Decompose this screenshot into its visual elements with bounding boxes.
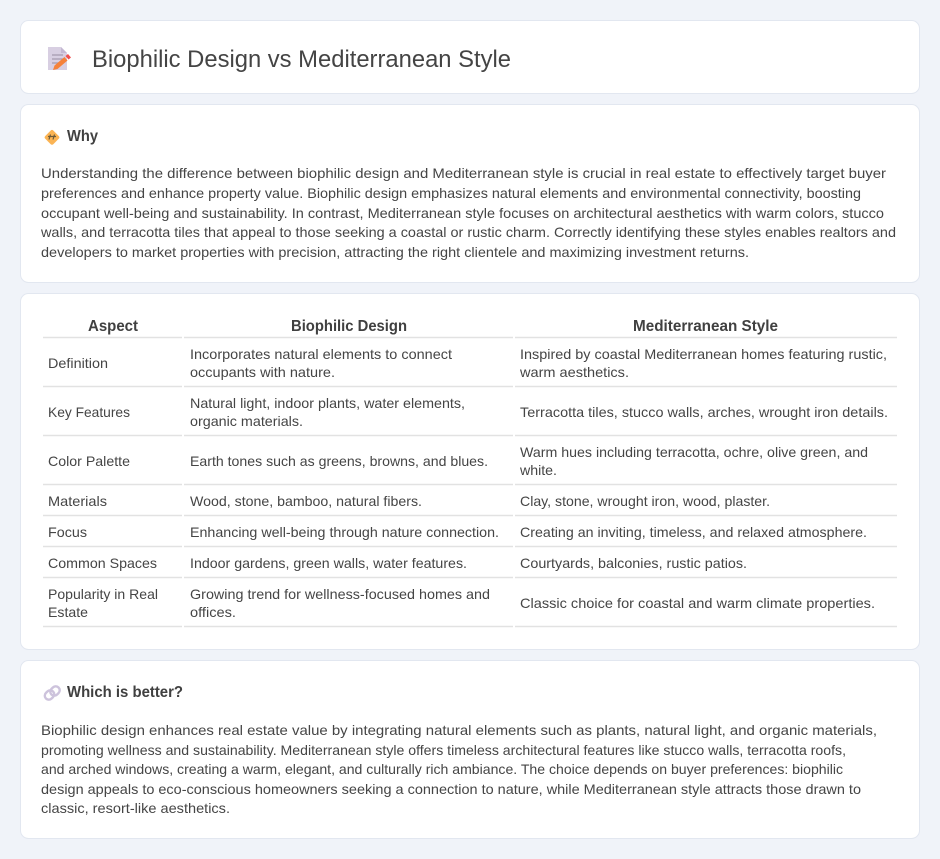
row: color palette: white. bbox=[519, 462, 557, 478]
row: key features: Key Features bbox=[48, 404, 130, 420]
heading: why: Why bbox=[67, 128, 98, 145]
row: common spaces: Indoor gardens, green walls, water features. bbox=[190, 555, 467, 571]
row: popularity in real estate: Growing trend for wellness-focused homes and bbox=[190, 586, 490, 602]
text block: why paragraph: developers to market properties with precision, attracting the right clientele and maximizing investment returns. bbox=[41, 244, 749, 260]
row: materials: Materials bbox=[48, 493, 107, 509]
row: definition: occupants with nature. bbox=[190, 364, 335, 380]
row: common spaces bbox=[48, 555, 747, 571]
row: color palette: Warm hues including terracotta, ochre, olive green, and bbox=[520, 444, 868, 460]
text block: which is better paragraph: promoting wellness and sustainability. Mediterranean style offers timeless architectural features like stucco walls, terracotta roofs, bbox=[41, 742, 846, 758]
row: focus bbox=[48, 524, 867, 540]
row: definition: warm aesthetics. bbox=[519, 364, 629, 380]
row: materials: Clay, stone, wrought iron, wood, plaster. bbox=[520, 493, 770, 509]
text block: why paragraph: Understanding the difference between biophilic design and Mediterranean style is crucial in real estate to effectively target buyer bbox=[41, 165, 886, 181]
text block: which is better paragraph: and arched windows, creating a warm, elegant, and culturally rich ambiance. The choice depends on buyer preferences: biophilic bbox=[41, 761, 843, 777]
row: definition: Incorporates natural elements to connect bbox=[190, 346, 452, 362]
row: popularity in real estate: Estate bbox=[48, 604, 88, 620]
row: key features: Natural light, indoor plants, water elements, bbox=[190, 395, 465, 411]
text block: why paragraph bbox=[40, 165, 896, 260]
row: materials: Wood, stone, bamboo, natural fibers. bbox=[190, 493, 422, 509]
text block: which is better paragraph: design appeals to eco-conscious homeowners seeking a connection to nature, while Mediterranean style attracts those drawn to bbox=[41, 781, 861, 797]
row: color palette: Color Palette bbox=[48, 453, 130, 469]
row: popularity in real estate: Popularity in Real bbox=[48, 586, 158, 602]
row: definition bbox=[48, 346, 887, 380]
row: focus: Creating an inviting, timeless, and relaxed atmosphere. bbox=[520, 524, 867, 540]
text block: which is better paragraph: classic, resort-like aesthetics. bbox=[41, 800, 230, 816]
text block: why paragraph: walls, and terracotta tiles that appeal to those seeking a coastal or rustic charm. Correctly identifying these styles enables realtors and bbox=[40, 224, 896, 240]
row: definition: Inspired by coastal Mediterranean homes featuring rustic, bbox=[520, 346, 887, 362]
row: popularity in real estate: offices. bbox=[190, 604, 236, 620]
row: materials bbox=[48, 493, 770, 509]
table header: Mediterranean Style bbox=[633, 318, 778, 335]
heading: which is better: Which is better? bbox=[67, 684, 183, 701]
panel: why bbox=[20, 104, 920, 282]
row: key features: Terracotta tiles, stucco walls, arches, wrought iron details. bbox=[520, 404, 888, 420]
text block: why paragraph: preferences and enhance property value. Biophilic design emphasizes natural elements and environmental connectivity, boosting bbox=[41, 185, 861, 201]
row: common spaces: Courtyards, balconies, rustic patios. bbox=[520, 555, 747, 571]
row: focus: Focus bbox=[48, 524, 87, 540]
title: Biophilic Design vs Mediterranean Style bbox=[92, 46, 511, 73]
row: key features bbox=[48, 395, 888, 429]
row: key features: organic materials. bbox=[190, 413, 303, 429]
row: color palette: Earth tones such as greens, browns, and blues. bbox=[190, 453, 488, 469]
row: common spaces: Common Spaces bbox=[48, 555, 157, 571]
text block: which is better paragraph: Biophilic design enhances real estate value by integrating natural elements such as plants, natural light, and organic materials, bbox=[41, 722, 877, 738]
row: color palette bbox=[48, 444, 868, 478]
panel: which is better bbox=[20, 660, 920, 838]
table header: Aspect bbox=[88, 318, 139, 335]
row: definition: Definition bbox=[48, 355, 108, 371]
icon: construction diamond bbox=[44, 129, 60, 145]
row: focus: Enhancing well-being through nature connection. bbox=[190, 524, 499, 540]
row: popularity in real estate bbox=[48, 586, 875, 620]
icon: memo with pencil bbox=[48, 47, 71, 70]
icon: link bbox=[43, 685, 61, 701]
panel: comparison table bbox=[20, 294, 920, 650]
text block: which is better paragraph bbox=[41, 722, 877, 816]
table header: Biophilic Design bbox=[291, 318, 407, 335]
panel: title header bbox=[20, 20, 920, 94]
row: popularity in real estate: Classic choice for coastal and warm climate properties. bbox=[520, 595, 875, 611]
text block: why paragraph: occupant well-being and sustainability. In contrast, Mediterranean style focuses on architectural aesthetics with warm colors, stucco bbox=[41, 205, 884, 221]
table header bbox=[88, 318, 778, 335]
